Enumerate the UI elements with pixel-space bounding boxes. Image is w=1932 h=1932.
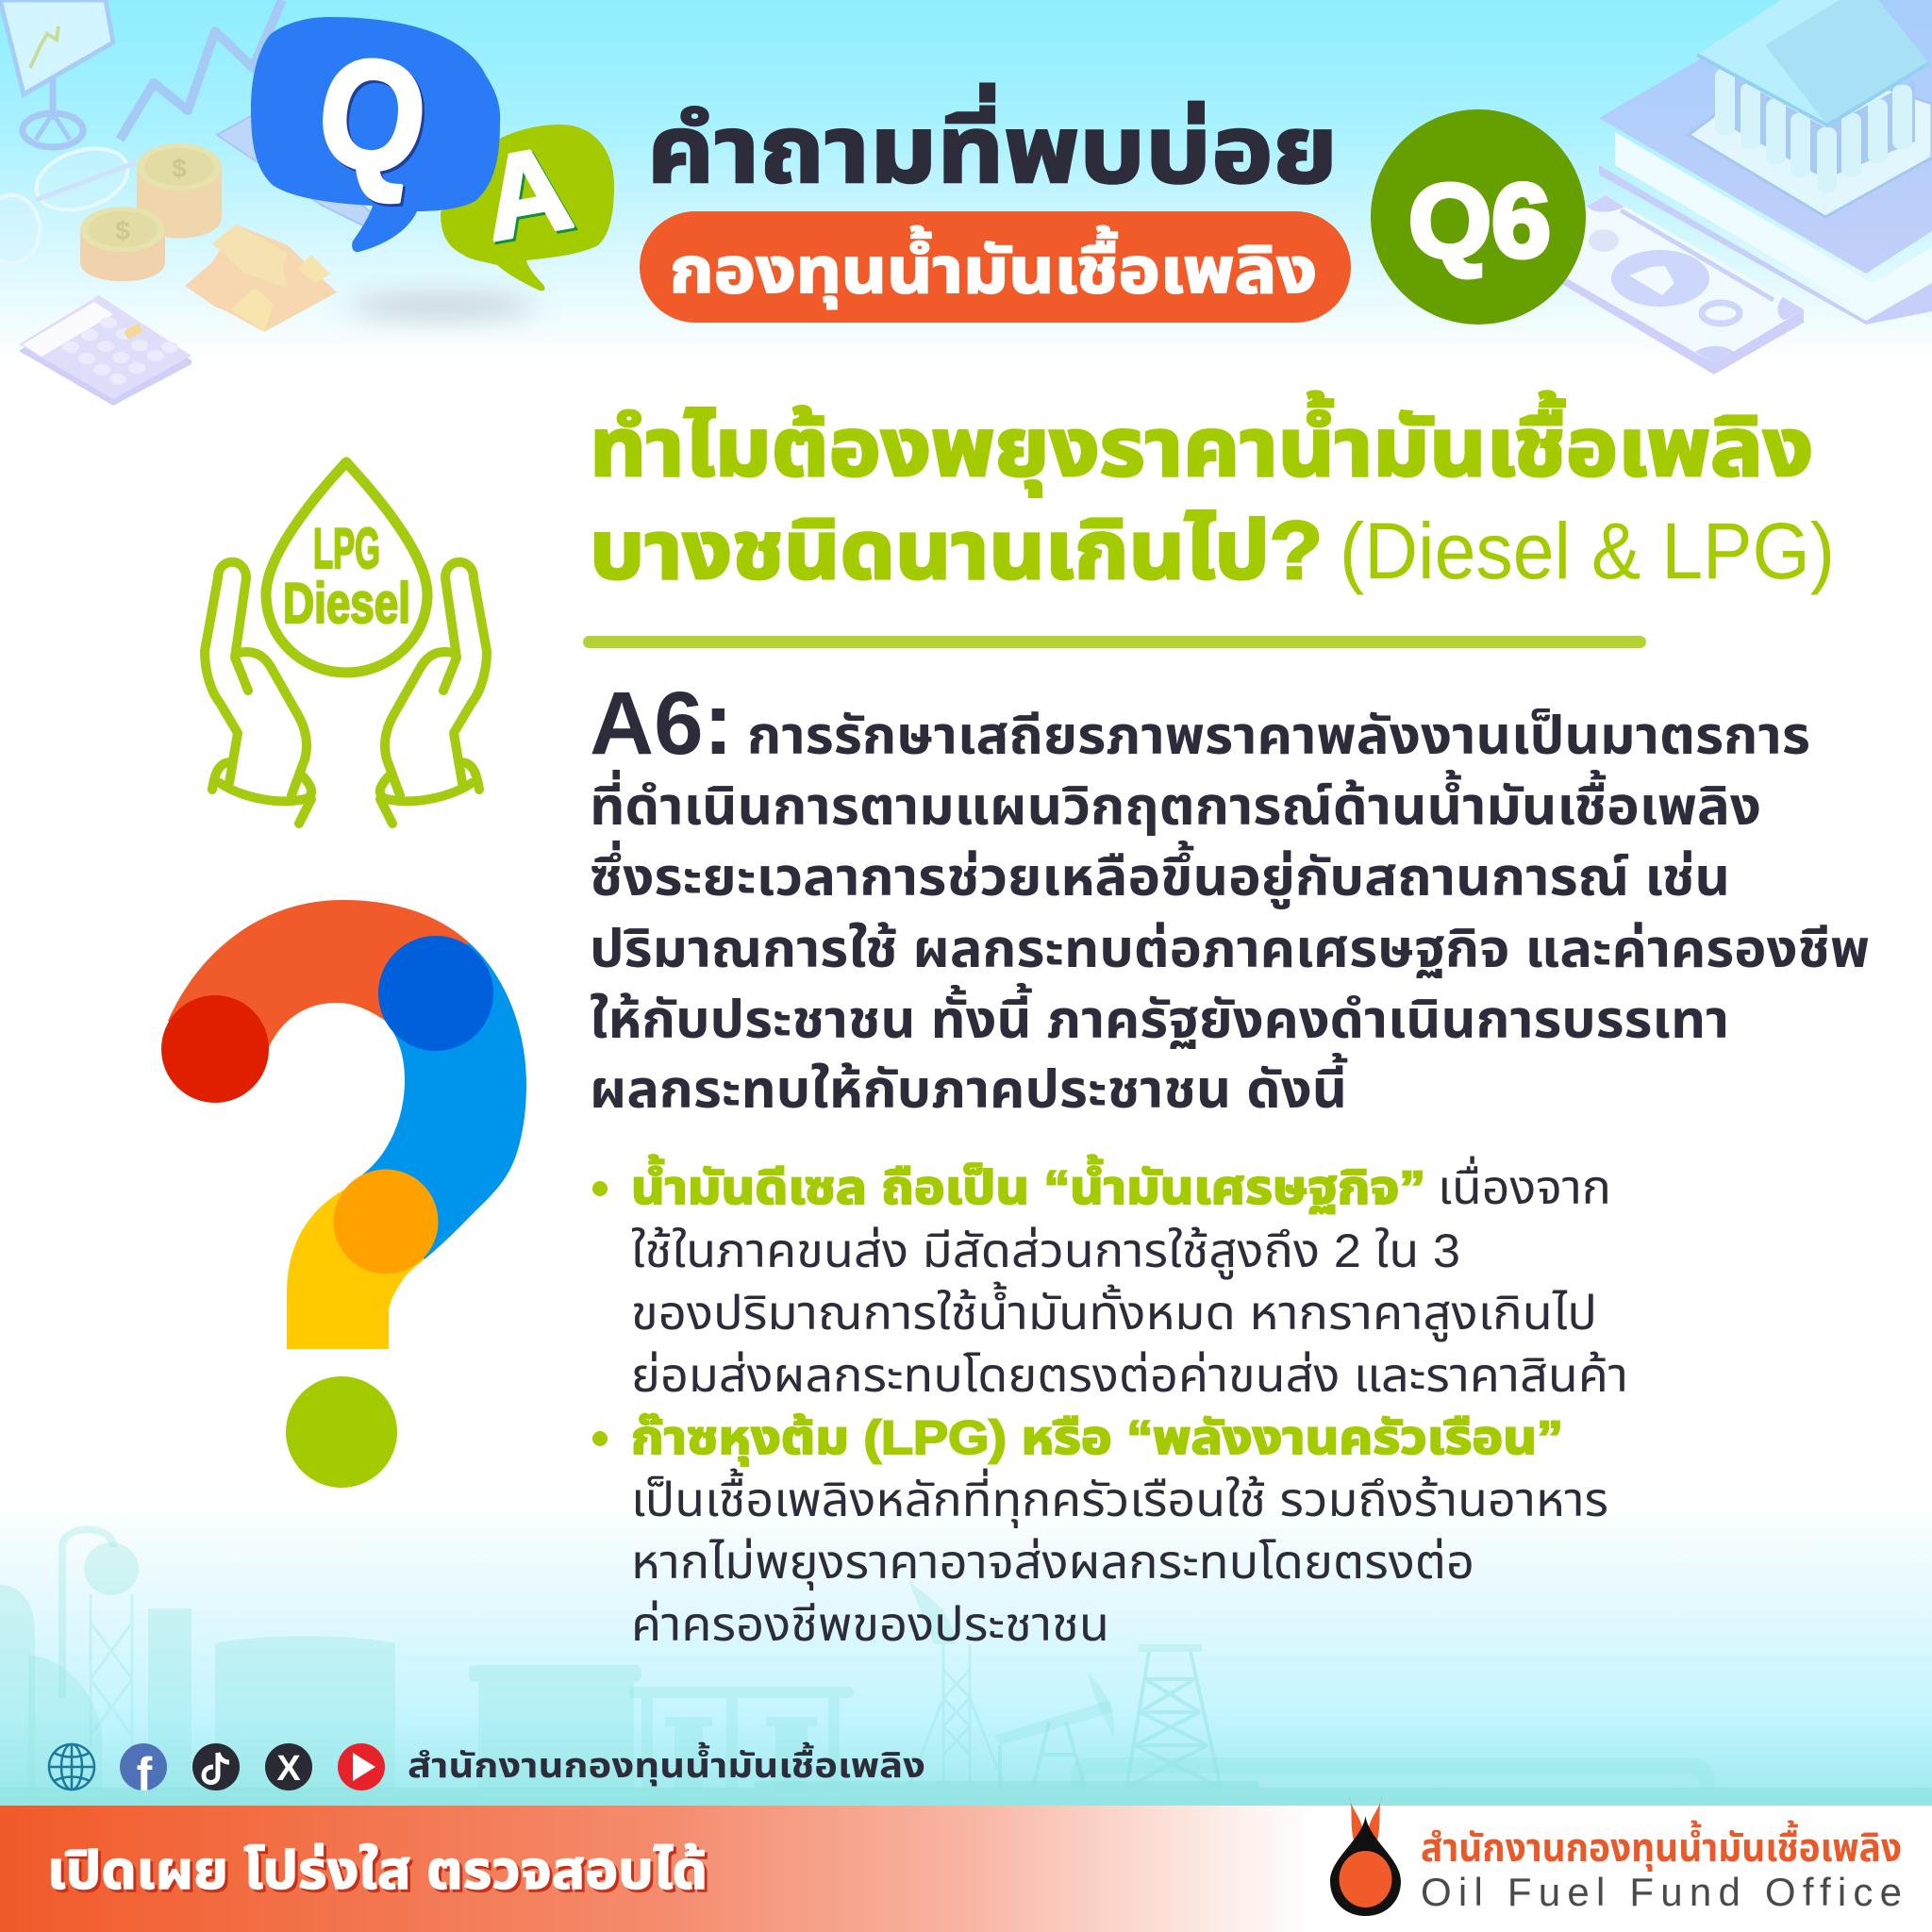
background: refinery silhouette xyxy=(0,1529,1932,1806)
bank dark interior xyxy=(1722,71,1915,179)
tablet behind bubble xyxy=(217,115,371,229)
icon: hands holding fuel drop xyxy=(205,462,487,824)
question heading: ทำไมต้องพยุงราคาน้ำมันเชื้อเพลิง xyxy=(590,391,1813,496)
bank columns xyxy=(1715,69,1912,192)
orange arc xyxy=(168,900,469,1066)
bullet: LPG xyxy=(592,1411,1608,1651)
bullet: LPG: ค่าครองชีพของประชาชน xyxy=(631,1598,1109,1651)
icon: tiktok xyxy=(192,1743,240,1790)
answer paragraph: ปริมาณการใช้ ผลกระทบต่อภาคเศรษฐกิจ และค่าครองชีพ xyxy=(590,919,1870,978)
bubble shape xyxy=(441,125,614,291)
glasses xyxy=(0,138,137,263)
amber joint xyxy=(334,1170,438,1274)
banknote xyxy=(1516,195,1804,375)
question heading: บางชนิดนานเกินไป? xyxy=(590,506,1323,596)
blue arc xyxy=(361,942,526,1259)
question heading: (Diesel & LPG) xyxy=(1340,507,1835,595)
drop xyxy=(266,462,427,673)
bullet: diesel: ย่อมส่งผลกระทบโดยตรงต่อค่าขนส่ง และราคาสินค้า xyxy=(631,1349,1628,1402)
social account name: สำนักงานกองทุนน้ำมันเชื้อเพลิง xyxy=(408,1741,925,1786)
flare tower xyxy=(908,1578,955,1644)
question heading xyxy=(590,391,1835,596)
building xyxy=(469,1665,641,1682)
bullet: diesel: ของปริมาณการใช้น้ำมันทั้งหมด หากราคาสูงเกินไป xyxy=(631,1281,1597,1341)
answer paragraph: A6: xyxy=(590,674,733,774)
answer paragraph: การรักษาเสถียรภาพราคาพลังงานเป็นมาตรการ xyxy=(747,706,1810,765)
icon: X xyxy=(265,1743,312,1790)
subtitle pill xyxy=(640,211,1351,323)
pumpjack xyxy=(993,1700,1113,1745)
bank white body xyxy=(1615,132,1932,316)
tank xyxy=(215,1636,395,1792)
A speech bubble xyxy=(441,122,614,291)
title: คำถามที่พบบ่อย xyxy=(647,84,1338,203)
footer band white end xyxy=(1311,1806,1932,1932)
sphere tank and tower xyxy=(84,1542,139,1595)
bank platform xyxy=(1599,0,1932,274)
bullet: diesel xyxy=(592,1155,1628,1402)
logo: oil fuel fund office xyxy=(1330,1795,1902,1916)
icon: facebook: f xyxy=(137,1748,153,1801)
icon: X: X xyxy=(276,1749,301,1789)
letter A: A xyxy=(476,124,583,268)
office names: สำนักงานกองทุนน้ำมันเชื้อเพลิง xyxy=(1421,1820,1902,1872)
pipeline xyxy=(1071,1757,1715,1788)
slogan: เปิดเผย โปร่งใส ตรวจสอบได้ xyxy=(50,1843,710,1903)
icon: globe xyxy=(49,1744,94,1790)
bullet: LPG: ก๊าซหุงต้ม (LPG) หรือ “พลังงานครัวเรือน” xyxy=(631,1411,1563,1466)
bullet: LPG: เป็นเชื้อเพลิงหลักที่ทุกครัวเรือนใช้ รวมถึงร้านอาหาร xyxy=(631,1468,1608,1528)
derrick xyxy=(1139,1644,1202,1652)
background: top sky gradient xyxy=(0,0,1932,363)
icon: youtube xyxy=(338,1743,385,1790)
subtitle pill: กองทุนน้ำมันเชื้อเพลิง xyxy=(670,225,1317,309)
answer paragraph: ให้กับประชาชน ทั้งนี้ ภาครัฐยังคงดำเนินการบรรเทา xyxy=(590,982,1729,1049)
bank roof xyxy=(1697,0,1840,125)
gas station canopy xyxy=(629,1687,854,1698)
coins: $ xyxy=(115,216,130,245)
bank lower slab xyxy=(1599,165,1932,325)
chart ribbon line xyxy=(120,0,282,140)
answer paragraph xyxy=(590,674,1870,1119)
drop labels: Diesel xyxy=(283,572,410,635)
social icons row xyxy=(49,1743,385,1801)
answer paragraph: ที่ดำเนินการตามแผนวิกฤตการณ์ด้านน้ำมันเชื้อเพลิง xyxy=(590,769,1761,836)
right hand xyxy=(380,562,487,824)
coins: $ xyxy=(172,154,187,183)
Q speech bubble xyxy=(251,17,500,252)
tall towers xyxy=(0,1585,35,1792)
dark blue joint xyxy=(378,936,493,1051)
illustration: faded finance items left xyxy=(0,0,371,406)
drop labels: LPG xyxy=(313,517,380,580)
yellow stem xyxy=(287,1191,425,1349)
green dot xyxy=(286,1376,397,1488)
Q6 badge xyxy=(1371,109,1586,325)
icon: facebook xyxy=(120,1743,167,1801)
letter Q: Q xyxy=(308,22,437,208)
letter Q: Q xyxy=(310,25,440,210)
divider rule xyxy=(583,636,1646,648)
flames xyxy=(1349,1795,1382,1844)
bubble ground shadow xyxy=(348,295,537,318)
logo: oil fuel fund office: Oil Fuel Fund Office xyxy=(1421,1870,1902,1914)
drop labels xyxy=(283,517,410,635)
bullet: diesel: น้ำมันดีเซล ถือเป็น “น้ำมันเศรษฐกิจ” xyxy=(631,1155,1425,1214)
answer paragraph: ซึ่งระยะเวลาการช่วยเหลือขึ้นอยู่กับสถานการณ์ เช่น xyxy=(590,840,1730,909)
bank steps xyxy=(1689,57,1932,217)
Q6 badge: Q6 xyxy=(1408,163,1551,279)
red end cap xyxy=(161,995,269,1103)
background: bottom gradient xyxy=(0,1500,1932,1807)
answer paragraph: ผลกระทบให้กับภาคประชาชน ดังนี้ xyxy=(590,1052,1348,1119)
bullet: diesel: เนื่องจาก xyxy=(1438,1156,1611,1214)
calculator xyxy=(19,295,192,406)
bullet: diesel: ใช้ในภาคขนส่ง มีสัดส่วนการใช้สูงถึง 2 ใน 3 xyxy=(631,1224,1460,1279)
left hand xyxy=(205,562,311,824)
bullet: LPG: หากไม่พยุงราคาอาจส่งผลกระทบโดยตรงต่อ xyxy=(631,1536,1474,1591)
bubble shape xyxy=(251,17,500,252)
letter A: A xyxy=(474,122,580,265)
coins xyxy=(80,143,222,281)
chart board xyxy=(0,0,113,147)
icon: multicolour question mark xyxy=(161,900,526,1488)
footer band xyxy=(0,1806,1311,1932)
gold bars xyxy=(185,225,337,332)
drop xyxy=(1330,1816,1401,1916)
slogan: เปิดเผย โปร่งใส ตรวจสอบได้ xyxy=(47,1840,708,1900)
illustration: faded bank and banknote right xyxy=(1516,0,1932,375)
